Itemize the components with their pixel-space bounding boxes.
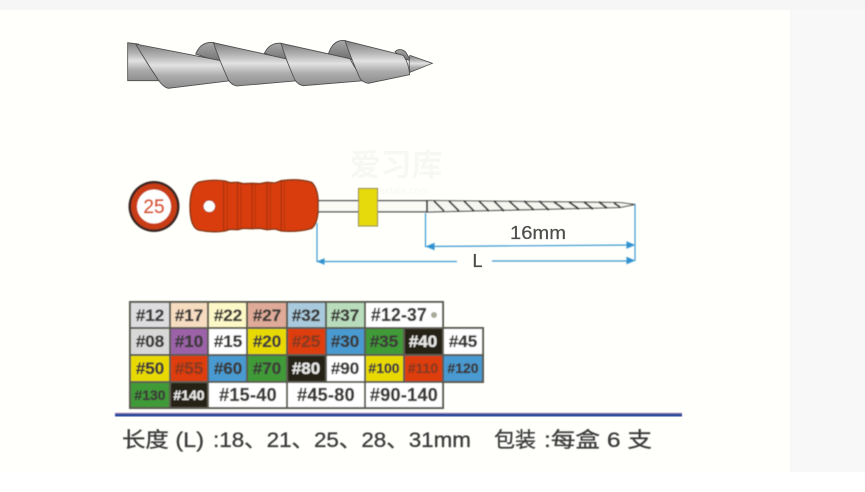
row 2: #45	[449, 332, 477, 351]
watermark: 爱习库	[350, 148, 442, 183]
row 2: #20	[253, 332, 281, 351]
row 3: #50	[136, 359, 164, 378]
size colour table	[130, 302, 483, 408]
specifications line: 长度 (L)	[122, 429, 204, 452]
row 2: #25	[292, 332, 320, 351]
row 3: #80	[292, 359, 320, 378]
icon: size 25 badge: 25	[143, 197, 165, 218]
row 4: #130	[134, 387, 166, 403]
fluted working part	[427, 200, 635, 212]
specifications line: :18、21、25、28、31mm	[213, 429, 471, 452]
row 2	[131, 329, 482, 354]
row 4	[131, 383, 442, 407]
row 3: #60	[214, 359, 242, 378]
row 3: #120	[447, 360, 479, 376]
row 2: #40	[409, 332, 437, 351]
row 2: #35	[370, 332, 398, 351]
row 4: #15-40	[219, 385, 277, 405]
row 1	[131, 303, 442, 327]
shaft	[318, 200, 428, 212]
row 1: #12-37	[371, 305, 427, 325]
handle	[190, 180, 318, 232]
dimension: 16 mm	[426, 213, 634, 250]
divider rule	[115, 412, 682, 416]
label: L: L	[472, 251, 483, 271]
watermark: yaxuetala.com	[364, 186, 428, 197]
row 1: #22	[214, 306, 242, 325]
row 1: #37	[331, 306, 359, 325]
row 1: #17	[175, 306, 203, 325]
row 3: #90	[331, 359, 359, 378]
specifications line: 包装	[494, 429, 536, 452]
row 2: #30	[331, 332, 359, 351]
row 4: #45-80	[297, 385, 355, 405]
stopper	[358, 188, 378, 226]
row 2: #08	[136, 332, 164, 351]
row 1: #27	[253, 306, 281, 325]
row 3: #110	[408, 360, 438, 376]
row 1: #12	[136, 306, 164, 325]
icon: size 25 badge	[128, 181, 180, 232]
row 4: #140	[173, 387, 205, 403]
row 3	[131, 356, 482, 381]
row 2: #15	[214, 332, 242, 351]
specifications line	[122, 429, 652, 452]
specifications line: :每盒 6 支	[544, 429, 652, 452]
row 3: #55	[175, 359, 203, 378]
label: 16mm: 16mm	[510, 223, 566, 243]
row 4: #90-140	[370, 385, 438, 405]
file instrument	[190, 180, 635, 232]
row 3: #70	[253, 359, 281, 378]
row 1: #32	[292, 306, 320, 325]
table frame	[130, 302, 483, 408]
dimension: overall length L	[317, 204, 635, 264]
icon: enlarged spiral file tip	[128, 40, 432, 88]
row 3: #100	[368, 360, 400, 376]
row 2: #10	[175, 332, 203, 351]
